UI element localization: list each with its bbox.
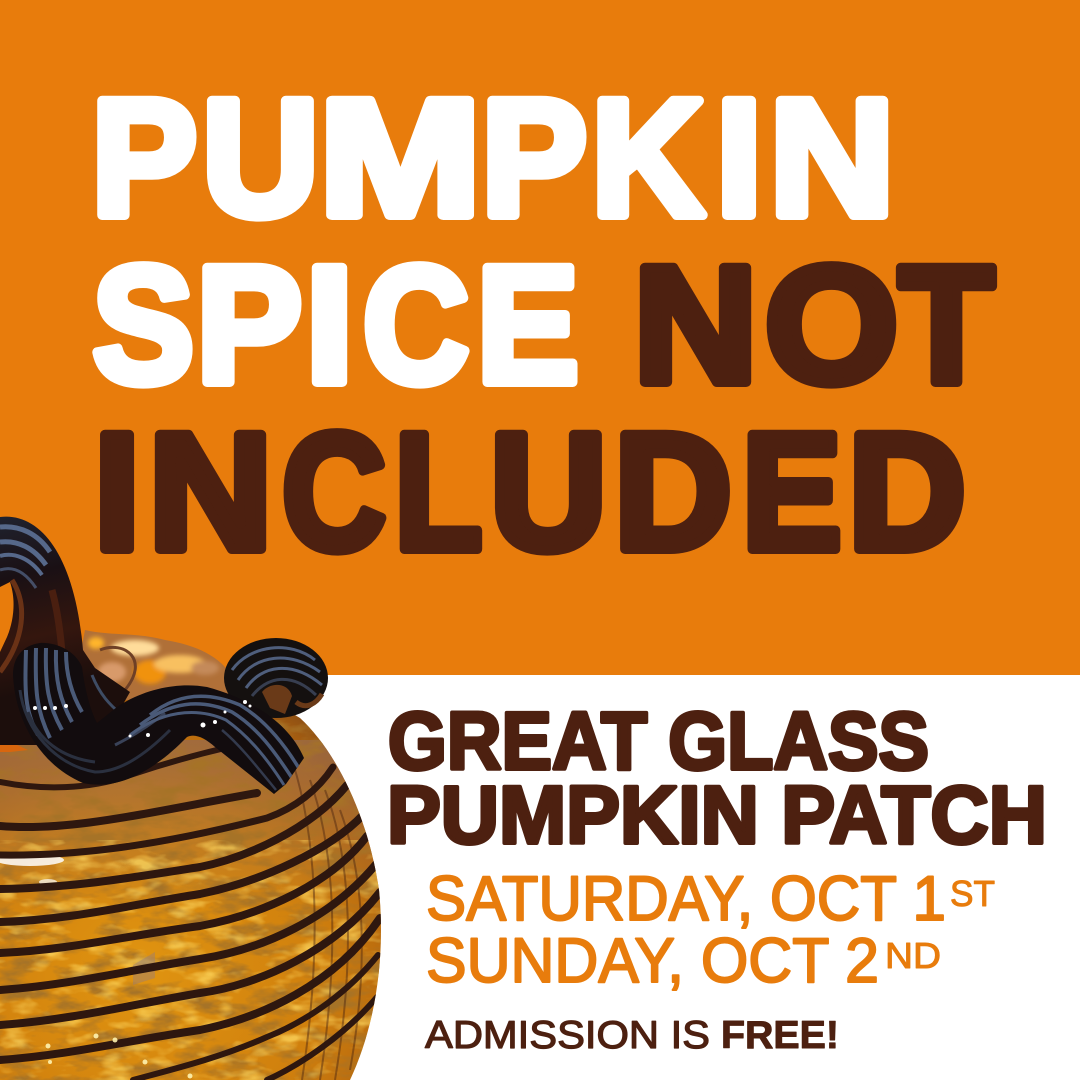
heading: Great Glass Pumpkin Patch: GREAT GLASS [388,696,929,787]
icon: glass pumpkin [0,517,385,1080]
title line 2: SPICE: E [477,233,579,418]
title: Pumpkin Spice Not Included [91,66,994,585]
dates: SATURDAY, OCT 1 [426,864,946,934]
title line 2: NOT [634,233,994,418]
title line 3: INCLUDED: C [282,400,386,585]
heading: Great Glass Pumpkin Patch: PUMPKIN PATCH [387,770,1047,861]
dates: ND [885,935,941,976]
stem: right curl [224,638,328,718]
pumpkin lid [60,630,240,760]
title line 2: NOT: O [765,233,898,418]
title line 3: INCLUDED: L [394,400,482,585]
title line 1: PUMPKIN: I [716,66,762,251]
pumpkin body [0,700,385,1080]
title line 2: NOT: T [899,233,994,418]
admission note: ADMISSION IS [425,1014,710,1057]
title line 2: SPICE: P [196,233,302,418]
stem: tall arch [0,517,130,745]
dates [426,864,995,996]
title line 2: SPICE: I [305,233,354,418]
title line 3: INCLUDED: D [848,400,966,585]
admission note [425,1014,839,1057]
title line 2: NOT: N [634,233,758,418]
title line 2: SPICE: C [363,233,469,418]
title line 1: PUMPKIN: N [769,66,895,251]
meridian hatching [292,760,362,1080]
title line 1: PUMPKIN: P [91,66,197,251]
panel: orange background [0,0,1080,675]
title line 3: INCLUDED: E [742,400,842,585]
admission note: FREE! [721,1014,839,1057]
title line 1: PUMPKIN: P [481,66,587,251]
title line 3: INCLUDED: U [490,400,607,585]
title line 2: SPICE [92,233,579,418]
dates: SUNDAY, OCT 2 [426,926,879,996]
title line 3: INCLUDED: N [148,400,273,585]
title line 1: PUMPKIN: M [319,66,481,251]
title line 3: INCLUDED: I [94,400,140,585]
title line 1: PUMPKIN: U [202,66,319,251]
stem: twisted vine [13,643,304,794]
title line 3: INCLUDED: D [614,400,732,585]
title line 3: INCLUDED [94,400,966,585]
heading: Great Glass Pumpkin Patch [387,696,1047,861]
title line 1: PUMPKIN [91,66,895,251]
title line 1: PUMPKIN: K [592,66,704,251]
dates: ST [950,873,995,914]
title line 2: SPICE: S [92,233,194,418]
